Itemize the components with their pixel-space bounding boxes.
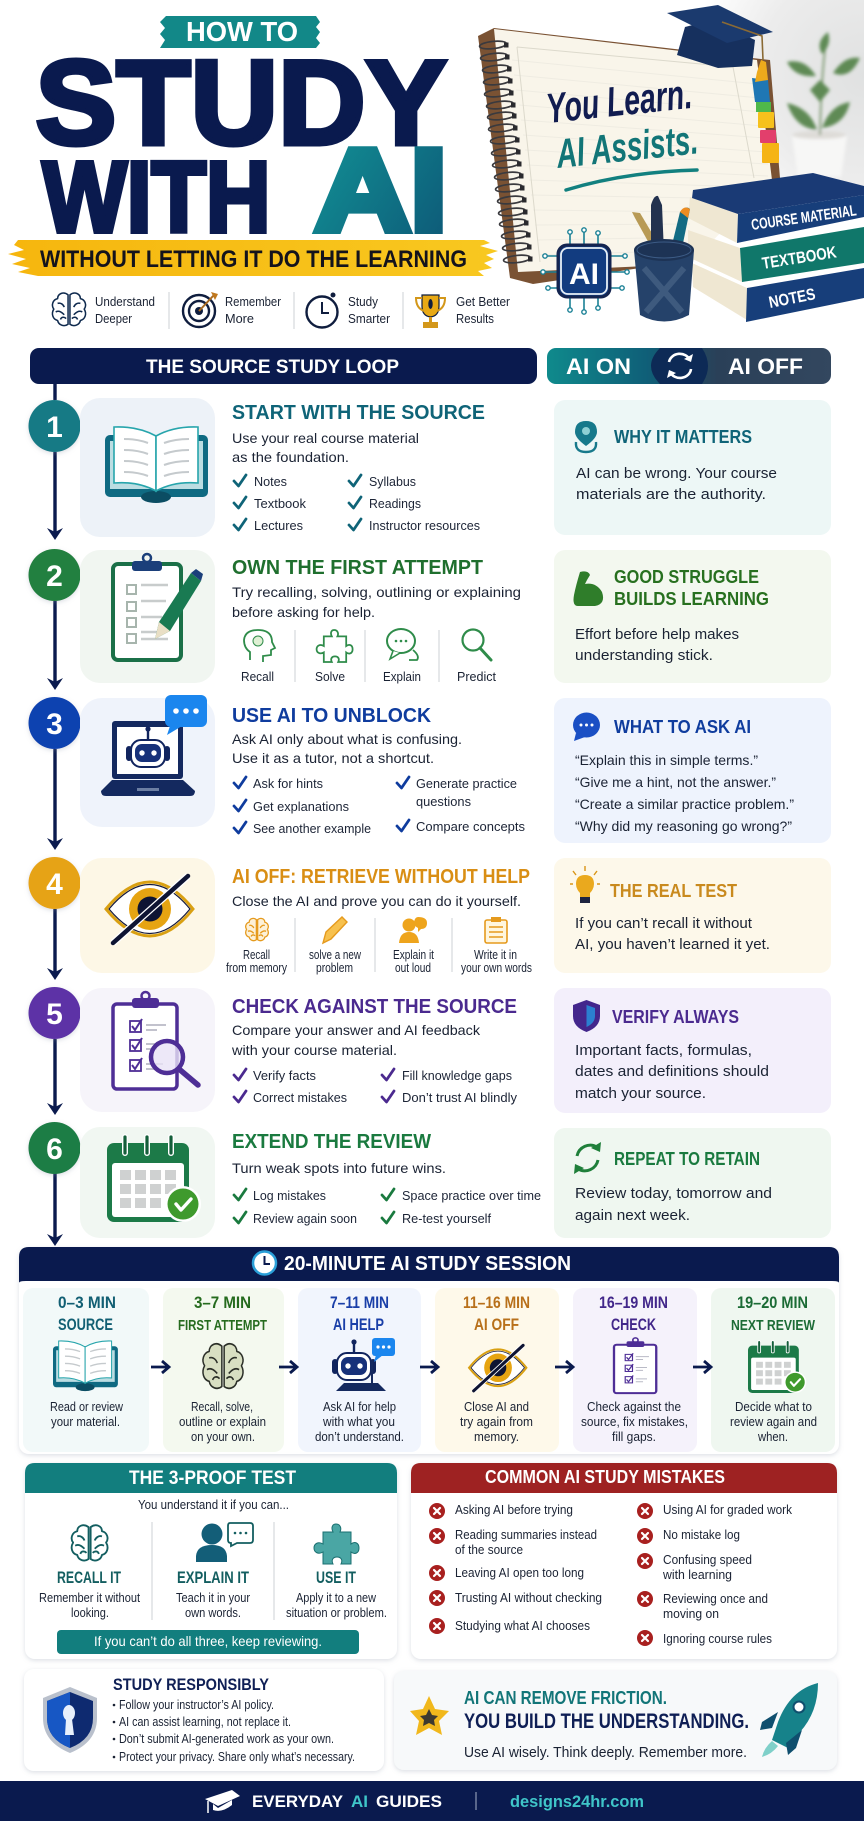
icon: light bulb <box>570 866 600 903</box>
mistakes left column <box>429 1503 602 1634</box>
arrow to step 4 <box>47 838 63 850</box>
checklist: Readings <box>369 496 421 511</box>
checklist: Compare concepts <box>416 819 525 834</box>
action: solve a new problem <box>309 917 362 975</box>
heading: CHECK AGAINST THE SOURCE <box>232 996 517 1018</box>
session header bar: 20-MINUTE AI STUDY SESSION <box>284 1253 571 1275</box>
title block <box>8 16 498 276</box>
heading: USE AI TO UNBLOCK <box>232 705 432 727</box>
skill: explain <box>383 629 421 684</box>
checklist: Don’t trust AI blindly <box>402 1090 517 1105</box>
mistakes right column: Ignoring course rules <box>663 1632 772 1646</box>
mistakes right column: Confusing speed <box>663 1553 752 1567</box>
handwritten note: You Learn: You Learn. <box>544 70 694 132</box>
description: with your course material. <box>231 1042 397 1058</box>
icon: footer graduation cap <box>205 1790 240 1813</box>
action: solve a new problem: problem <box>316 961 353 975</box>
mistakes left column: Asking AI before trying <box>455 1503 573 1517</box>
description: Close the AI and prove you can do it yourself. <box>232 893 521 909</box>
proof header <box>25 1463 397 1493</box>
number badge 2 <box>28 549 80 601</box>
icon: rocket <box>760 1683 818 1757</box>
description: Ask AI only about what is confusing. <box>232 731 462 747</box>
mistakes header <box>411 1463 837 1493</box>
skill: solve <box>315 630 353 684</box>
checklist: questions <box>416 794 471 809</box>
card: 19-20 min next review <box>711 1288 835 1452</box>
description: Compare your answer and AI feedback <box>232 1022 481 1038</box>
benefit: study smarter: Study <box>348 295 379 309</box>
notebook index tabs <box>752 78 779 163</box>
yellow brush banner: WITHOUT LETTING IT DO THE LEARNING <box>40 246 467 273</box>
illustration panel: crossed eye <box>80 858 215 973</box>
card: 0-3 min source: Read or review <box>50 1400 124 1414</box>
heading: OWN THE FIRST ATTEMPT <box>232 557 483 579</box>
card: 3-7 min first attempt: 3–7 MIN <box>194 1294 251 1312</box>
arrow to step 5 <box>47 968 63 980</box>
step 6 <box>28 1122 831 1246</box>
proof callout: If you can’t do all three, keep reviewing. <box>94 1633 322 1649</box>
skill: recall <box>241 630 275 684</box>
number badge 4: 4 <box>46 868 63 901</box>
description: before asking for help. <box>232 604 375 620</box>
side panel: what to ask AI: WHAT TO ASK AI <box>614 717 751 737</box>
session header bar <box>19 1247 839 1283</box>
section bar: the source study loop: THE SOURCE STUDY LOOP <box>146 356 399 378</box>
action: write in own words: Write it in <box>474 948 517 962</box>
footer <box>0 1781 864 1821</box>
icon: repeat arrows <box>574 1142 601 1174</box>
arrow to step 3 <box>47 678 63 690</box>
side panel: good struggle <box>554 550 831 683</box>
policy bullets: AI can assist learning, not replace it. <box>119 1715 291 1729</box>
action: write in own words: your own words <box>461 961 532 975</box>
action: recall from memory: Recall <box>243 948 270 962</box>
card: 7-11 min AI help: Ask AI for help <box>323 1400 396 1414</box>
side panel: what to ask AI: “Give me a hint, not the answer.” <box>575 774 776 790</box>
checklist: Get explanations <box>253 799 349 814</box>
side panel: what to ask AI: “Why did my reasoning go wrong?” <box>575 818 792 834</box>
proof column: use it: Apply it to a new <box>296 1591 377 1605</box>
headline: AI: AI <box>315 125 447 255</box>
card: 19-20 min next review: NEXT REVIEW <box>731 1317 816 1334</box>
side panel: verify always: VERIFY ALWAYS <box>612 1007 739 1027</box>
card: 16-19 min check: fill gaps. <box>612 1430 656 1444</box>
headline: WITH: WITH <box>42 142 270 254</box>
number badge 6: 6 <box>46 1133 63 1166</box>
checklist: Lectures <box>254 518 303 533</box>
side panel: why it matters: AI can be wrong. Your course <box>576 466 777 482</box>
card: 16-19 min check: CHECK <box>611 1316 656 1334</box>
number badge 3 <box>28 697 80 749</box>
side panel: what to ask AI: “Explain this in simple terms.” <box>575 752 758 768</box>
side panel: the real test: If you can’t recall it without <box>575 916 752 932</box>
proof intro: You understand it if you can... <box>138 1498 289 1512</box>
description: Use it as a tutor, not a shortcut. <box>232 750 434 766</box>
mistakes left column: Leaving AI open too long <box>455 1566 584 1580</box>
panel: study responsibly <box>24 1669 384 1771</box>
proof column: explain it <box>176 1523 253 1620</box>
mistakes right column: Using AI for graded work <box>663 1503 793 1517</box>
side panel: repeat to retain: REPEAT TO RETAIN <box>614 1149 760 1169</box>
action icons row <box>226 917 532 975</box>
side panel: the real test: AI, you haven’t learned it yet. <box>575 937 770 953</box>
card: 16-19 min check: source, fix mistakes, <box>581 1415 688 1429</box>
card: 16-19 min check: Check against the <box>587 1400 681 1414</box>
checklist <box>234 776 525 836</box>
action: recall from memory: from memory <box>226 961 288 975</box>
icon: shield <box>573 1000 600 1032</box>
side panel: what to ask AI: “Create a similar practice problem.” <box>575 796 794 812</box>
yellow brush banner <box>8 240 498 276</box>
panel: closing message <box>394 1671 837 1770</box>
book: notes <box>692 263 864 322</box>
mistakes right column: No mistake log <box>663 1528 740 1542</box>
benefit: study smarter: Smarter <box>348 312 390 326</box>
arrow to session <box>47 1234 63 1246</box>
proof column: recall it <box>39 1525 140 1620</box>
book: textbook: TEXTBOOK <box>761 243 838 273</box>
side panel: good struggle: BUILDS LEARNING <box>614 589 769 609</box>
checklist <box>234 1068 517 1105</box>
card: 0-3 min source: SOURCE <box>58 1316 113 1334</box>
panel: common AI study mistakes <box>411 1463 837 1659</box>
heading: EXTEND THE REVIEW <box>232 1131 431 1153</box>
side panel: good struggle: GOOD STRUGGLE <box>614 567 759 587</box>
headline: STUDY: STUDY <box>36 36 446 170</box>
icon: sync arrows <box>667 354 693 378</box>
proof column: recall it: Remember it without <box>39 1591 140 1605</box>
checklist: Log mistakes <box>253 1188 326 1203</box>
mistakes right column: with learning <box>662 1568 732 1582</box>
icon: graduation cap <box>667 5 773 82</box>
toggle: AI on / AI off <box>547 348 831 384</box>
arrow: source to first attempt <box>151 1361 169 1373</box>
benefit: get better results: Get Better <box>456 295 510 309</box>
checklist: Ask for hints <box>253 776 323 791</box>
checklist: Re-test yourself <box>402 1211 491 1226</box>
panel: closing message: YOU BUILD THE UNDERSTANDING. <box>464 1710 749 1733</box>
ribbon: HOW TO: HOW TO <box>186 16 298 47</box>
arrow: first attempt to AI help <box>279 1361 297 1373</box>
action: solve a new problem: solve a new <box>309 948 362 962</box>
proof column: use it: USE IT <box>316 1568 356 1587</box>
checklist: Syllabus <box>369 474 416 489</box>
card: 11-16 min AI off: Close AI and <box>464 1400 529 1414</box>
card: 7-11 min AI help: AI HELP <box>333 1316 384 1334</box>
checklist: Fill knowledge gaps <box>402 1068 512 1083</box>
side panel: repeat to retain <box>554 1128 831 1238</box>
skill: recall: Recall <box>241 670 274 684</box>
side panel: repeat to retain: Review today, tomorrow and <box>575 1186 772 1202</box>
benefit: get better results <box>416 295 510 328</box>
side panel: what to ask AI <box>554 698 831 843</box>
action: explain it out loud <box>393 917 434 975</box>
side panel: good struggle: Effort before help makes <box>575 627 739 643</box>
mistakes left column: Reading summaries instead <box>455 1528 597 1542</box>
side panel: verify always: Important facts, formulas, <box>575 1043 752 1059</box>
icon: speech bubble <box>573 712 600 741</box>
illustration panel: calendar with check <box>80 1127 215 1238</box>
checklist: Instructor resources <box>369 518 480 533</box>
illustration panel: clipboard and magnifier <box>80 988 215 1112</box>
footer brand <box>252 1792 442 1811</box>
card: 7-11 min AI help: with what you <box>322 1415 395 1429</box>
panel: closing message: AI CAN REMOVE FRICTION. <box>464 1688 667 1708</box>
proof column: explain it: own words. <box>185 1606 241 1620</box>
card: 7-11 min AI help: don’t understand. <box>315 1430 404 1444</box>
section bar: the source study loop <box>30 348 537 384</box>
toggle: AI on / AI off: AI ON <box>566 354 631 379</box>
panel: closing message: Use AI wisely. Think deeply. Remember more. <box>464 1745 747 1761</box>
checklist: Review again soon <box>253 1211 357 1226</box>
number badge 5: 5 <box>46 998 63 1031</box>
mistakes right column: Reviewing once and <box>663 1592 768 1606</box>
skill: explain: Explain <box>383 670 421 684</box>
card: 3-7 min first attempt <box>163 1288 284 1452</box>
skill: predict: Predict <box>457 670 497 684</box>
illustration panel: clipboard and pencil <box>80 550 215 683</box>
action: explain it out loud: out loud <box>395 961 431 975</box>
mistakes right column: moving on <box>663 1607 719 1621</box>
heading: AI OFF: RETRIEVE WITHOUT HELP <box>232 866 530 888</box>
card: 11-16 min AI off <box>435 1288 559 1452</box>
card: 16-19 min check <box>573 1288 697 1452</box>
card: 3-7 min first attempt: Recall, solve, <box>191 1400 253 1414</box>
timeline connector line <box>53 384 57 1240</box>
skill: predict <box>457 630 497 684</box>
skill icons row <box>241 629 497 684</box>
book: course material <box>688 173 864 243</box>
checklist: See another example <box>253 821 371 836</box>
proof column: use it: situation or problem. <box>286 1606 387 1620</box>
description <box>232 731 462 766</box>
arrow: check to next review <box>693 1361 711 1373</box>
card: 11-16 min AI off: try again from <box>460 1415 533 1429</box>
proof column: recall it: RECALL IT <box>57 1568 121 1587</box>
card: 3-7 min first attempt: FIRST ATTEMPT <box>178 1317 267 1334</box>
number badge 3: 3 <box>46 708 63 741</box>
icon: gold star <box>410 1696 449 1735</box>
checklist <box>234 1188 541 1226</box>
step 2 <box>28 549 831 690</box>
side panel: verify always: dates and definitions should <box>575 1064 769 1080</box>
hero illustration: spiral notebook <box>478 28 780 284</box>
number badge 4 <box>28 857 80 909</box>
panel: 20-minute AI study session <box>19 1247 839 1454</box>
proof column: recall it: looking. <box>71 1606 109 1620</box>
side panel: why it matters: WHY IT MATTERS <box>614 427 752 447</box>
benefit: understand deeper <box>52 293 155 326</box>
benefit: remember more <box>183 292 281 327</box>
mistakes left column: Studying what AI chooses <box>455 1619 590 1633</box>
icon: flexed arm <box>574 571 603 606</box>
policy bullets <box>113 1698 355 1764</box>
panel: study responsibly: STUDY RESPONSIBLY <box>113 1675 270 1694</box>
policy bullets: Follow your instructor’s AI policy. <box>119 1698 274 1712</box>
card: 0-3 min source: 0–3 MIN <box>58 1294 116 1312</box>
checklist <box>234 474 480 533</box>
illustration panel: robot laptop <box>80 695 215 827</box>
description <box>232 584 521 620</box>
card: 11-16 min AI off: memory. <box>474 1430 519 1444</box>
skill: solve: Solve <box>315 670 345 684</box>
side panel: why it matters <box>554 400 831 535</box>
card: 0-3 min source <box>23 1288 149 1452</box>
footer brand: AI <box>351 1792 368 1811</box>
benefit: understand deeper: Deeper <box>95 312 132 326</box>
proof column: explain it: EXPLAIN IT <box>177 1568 249 1587</box>
policy bullets: Protect your privacy. Share only what’s necessary. <box>119 1750 355 1764</box>
card: 3-7 min first attempt: outline or explain <box>179 1415 266 1429</box>
side panel: why it matters: materials are the authority. <box>576 487 766 503</box>
arrow to step 2 <box>47 528 63 540</box>
number badge 5 <box>28 987 80 1039</box>
checklist: Correct mistakes <box>253 1090 347 1105</box>
action: recall from memory <box>226 918 288 975</box>
mistakes left column: Trusting AI without checking <box>455 1591 602 1605</box>
benefit: get better results: Results <box>456 312 494 326</box>
step 3 <box>28 695 831 850</box>
description <box>232 430 419 465</box>
card: 0-3 min source: your material. <box>51 1415 120 1429</box>
footer brand: GUIDES <box>376 1792 442 1811</box>
checklist: Generate practice <box>416 776 517 791</box>
description: as the foundation. <box>232 449 349 465</box>
proof header: THE 3-PROOF TEST <box>129 1468 296 1489</box>
card: 19-20 min next review: 19–20 MIN <box>737 1294 808 1312</box>
background wall and plant area <box>689 0 864 215</box>
footer URL: designs24hr.com <box>510 1792 644 1811</box>
arrow: AI off to check <box>555 1361 573 1373</box>
description: Use your real course material <box>232 430 419 446</box>
icon: AI chip <box>541 228 629 314</box>
number badge 1: 1 <box>46 411 63 444</box>
card: 19-20 min next review: when. <box>757 1430 788 1444</box>
card: 7-11 min AI help: 7–11 MIN <box>330 1294 389 1312</box>
description <box>231 1022 481 1058</box>
benefit: remember more: More <box>225 312 254 326</box>
icon: map pin <box>575 421 597 452</box>
illustration panel: open book <box>80 398 215 537</box>
proof column: explain it: Teach it in your <box>176 1591 250 1605</box>
benefit: understand deeper: Understand <box>95 295 155 309</box>
book: textbook <box>688 227 864 282</box>
footer brand: EVERYDAY <box>252 1792 344 1811</box>
checklist: Notes <box>254 474 287 489</box>
toggle: AI on / AI off: AI OFF <box>728 354 803 379</box>
book stack <box>688 173 864 322</box>
description: Turn weak spots into future wins. <box>232 1160 446 1176</box>
step 1 <box>28 398 831 540</box>
card: 16-19 min check: 16–19 MIN <box>599 1294 668 1312</box>
step 5 <box>28 987 831 1115</box>
panel: the 3-proof test <box>25 1463 397 1659</box>
step 4 <box>28 857 831 980</box>
checklist: Space practice over time <box>402 1188 541 1203</box>
description: Try recalling, solving, outlining or explaining <box>232 584 521 600</box>
checklist: Textbook <box>254 496 306 511</box>
card: 3-7 min first attempt: on your own. <box>191 1430 255 1444</box>
benefit: study smarter <box>306 292 390 328</box>
number badge 6 <box>28 1122 80 1174</box>
icon: blurred potted plant <box>787 32 860 177</box>
ribbon: HOW TO <box>160 16 320 48</box>
icon: AI chip: AI <box>569 258 599 291</box>
card: 11-16 min AI off: AI OFF <box>474 1316 519 1334</box>
proof column: use it <box>286 1524 387 1620</box>
arrow: AI help to AI off <box>420 1361 438 1373</box>
icon: pencil cup <box>632 196 694 322</box>
teal marker underline <box>566 170 697 190</box>
side panel: good struggle: understanding stick. <box>575 648 713 664</box>
side panel: the real test: THE REAL TEST <box>610 881 737 901</box>
card: 19-20 min next review: review again and <box>730 1415 817 1429</box>
mistakes left column: of the source <box>455 1543 523 1557</box>
arrow to step 6 <box>47 1103 63 1115</box>
side panel: verify always: match your source. <box>575 1086 706 1102</box>
checklist: Verify facts <box>253 1068 316 1083</box>
policy bullets: Don’t submit AI-generated work as your own. <box>119 1732 334 1746</box>
book: notes: NOTES <box>767 285 817 312</box>
number badge 2: 2 <box>46 560 63 593</box>
benefit: remember more: Remember <box>225 295 281 309</box>
mistakes right column <box>637 1503 793 1646</box>
icon: shield with keyhole <box>43 1687 97 1753</box>
action: write in own words <box>461 917 532 975</box>
heading: START WITH THE SOURCE <box>232 402 485 424</box>
action: explain it out loud: Explain it <box>393 948 434 962</box>
number badge 1 <box>28 400 80 452</box>
mistakes header: COMMON AI STUDY MISTAKES <box>485 1467 725 1487</box>
side panel: repeat to retain: again next week. <box>575 1208 690 1224</box>
card: 11-16 min AI off: 11–16 MIN <box>463 1294 530 1312</box>
side panel: the real test <box>554 858 831 973</box>
card: 19-20 min next review: Decide what to <box>735 1400 812 1414</box>
card: 7-11 min AI help <box>298 1288 421 1452</box>
handwritten note: AI Assists: AI Assists. <box>553 116 700 177</box>
benefits row <box>52 292 510 328</box>
side panel: verify always <box>554 988 831 1113</box>
proof callout <box>57 1630 359 1654</box>
